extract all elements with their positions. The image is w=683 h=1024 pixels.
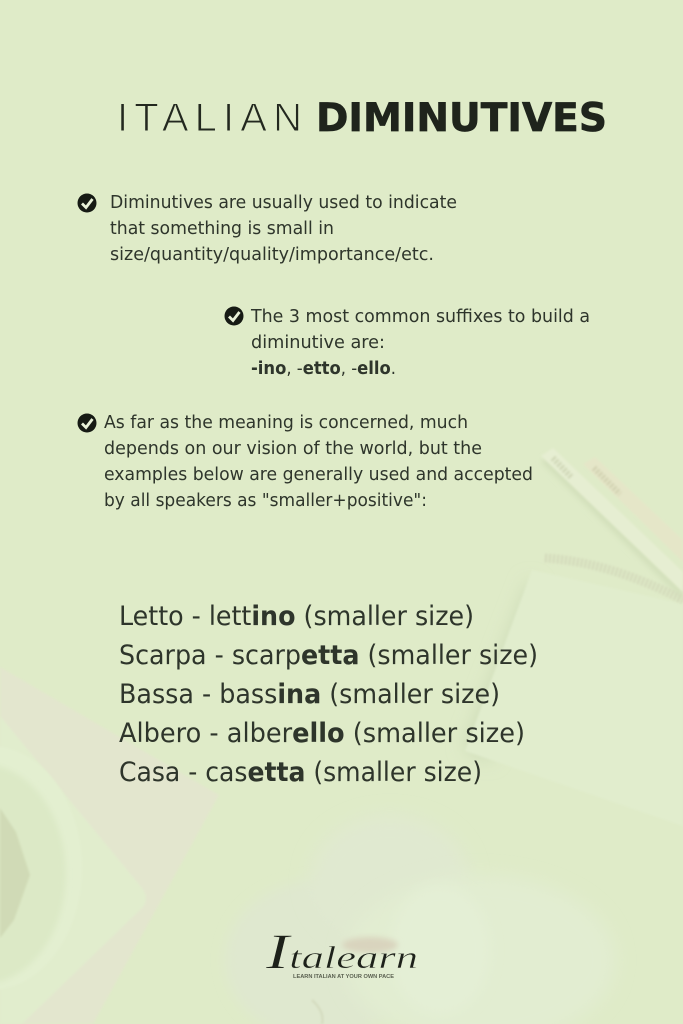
text: bullet 1 — [110, 192, 457, 265]
photo: pencils — [541, 448, 683, 600]
photo: white peony flower — [225, 815, 615, 1024]
photo: pink paper sheet — [0, 667, 219, 1024]
text: bullet 2: The 3 most common suffixes to build a — [250, 306, 590, 327]
text: bullet 2 — [250, 306, 590, 379]
text: bullet 3: As far as the meaning is concerned, much — [104, 412, 468, 433]
icon: check mark — [224, 306, 244, 326]
text: bullet 3: by all speakers as "smaller+positive": — [104, 490, 427, 511]
bullet 1 — [78, 192, 457, 265]
bullet 2 — [224, 306, 590, 379]
text: bullet 2: -ino, -etto, -ello. — [251, 358, 396, 379]
examples list: Letto - lettino (smaller size) — [119, 601, 474, 632]
logo: Italearn — [265, 923, 418, 979]
text: bullet 3: depends on our vision of the world, but the — [104, 438, 482, 459]
examples list: Bassa - bassina (smaller size) — [119, 679, 500, 710]
text: bullet 1: Diminutives are usually used to indicate — [110, 192, 457, 213]
text: bullet 2: diminutive are: — [251, 332, 385, 353]
bullet 3 — [78, 412, 533, 511]
logo: LEARN ITALIAN AT YOUR OWN PACE — [293, 974, 394, 980]
icon: check mark — [78, 414, 96, 432]
icon: check mark — [78, 194, 96, 212]
examples list: Albero - alberello (smaller size) — [119, 718, 525, 749]
photo: marble tray with bowl — [0, 716, 146, 1024]
examples list — [119, 601, 538, 788]
examples list: Scarpa - scarpetta (smaller size) — [119, 640, 538, 671]
title: DIMINUTIVES — [316, 95, 607, 141]
text: bullet 1: that something is small in — [110, 218, 334, 239]
title — [117, 95, 607, 141]
title: ITALIAN — [117, 96, 302, 140]
photo: white pouch — [464, 558, 683, 826]
text: bullet 1: size/quantity/quality/importance/etc. — [110, 244, 434, 265]
text: bullet 3 — [104, 412, 533, 511]
text: bullet 3: examples below are generally used and accepted — [104, 464, 533, 485]
examples list: Casa - casetta (smaller size) — [119, 757, 482, 788]
